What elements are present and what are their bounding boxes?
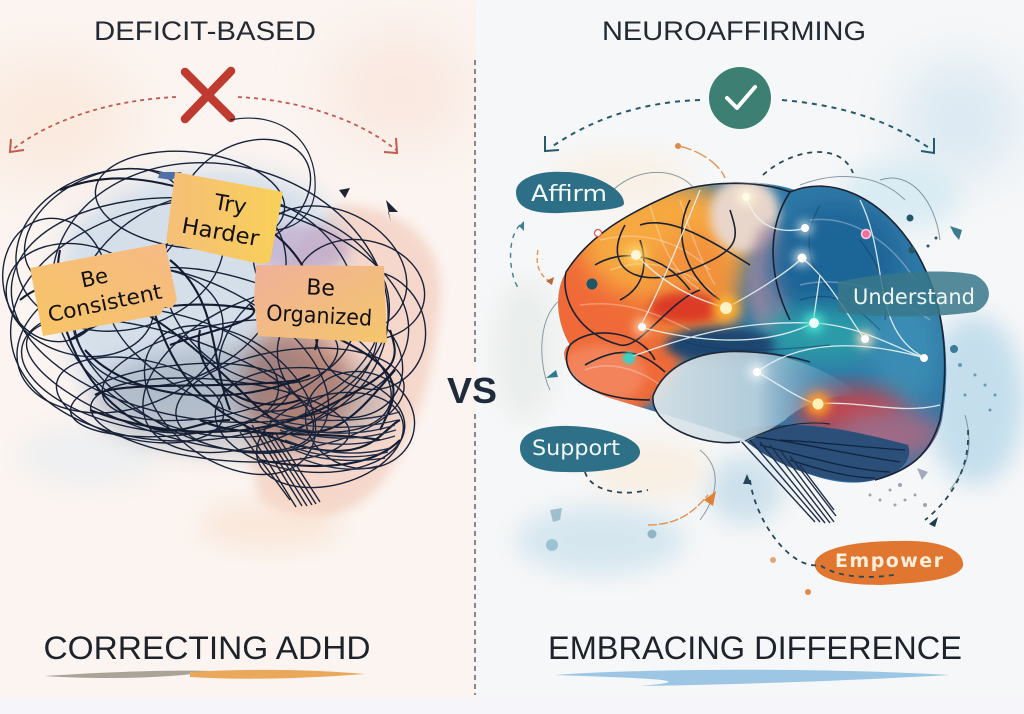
brain: cerebellum	[735, 425, 909, 482]
orange connectors	[537, 146, 725, 525]
brain: stem	[740, 440, 836, 523]
label: Understand	[838, 271, 989, 316]
sticky note: Try Harder: Try	[211, 190, 248, 220]
label: Understand: Understand	[853, 285, 975, 310]
label: Empower	[815, 541, 963, 585]
small arrowheads	[158, 172, 398, 222]
sticky note: Be Organized	[254, 265, 387, 343]
scribble: cerebellum hatching	[262, 410, 400, 469]
arrow: right dashed	[238, 97, 397, 153]
label: Affirm	[516, 172, 624, 213]
panel: deficit-based	[0, 0, 474, 698]
accent markers and speckles	[519, 143, 996, 595]
brain: outlines	[565, 183, 945, 480]
sticky note: Be Consistent: Be	[79, 263, 110, 292]
scribble: brain stem	[240, 425, 320, 507]
arrow: left dashed	[10, 97, 176, 152]
brain: cortex streaks	[580, 200, 930, 385]
icon: check badge	[709, 67, 771, 129]
label: Empower: Empower	[835, 550, 944, 572]
panel: neuroaffirming	[476, 0, 1024, 698]
colourful brain	[558, 182, 946, 524]
sticky note: Be Consistent	[30, 243, 177, 336]
label: Affirm: Affirm	[531, 182, 607, 207]
label: Support: Support	[532, 436, 620, 460]
sticky note: Try Harder: Harder	[180, 214, 262, 252]
brain: glowing nodes	[586, 188, 928, 416]
washes: left panel	[0, 35, 470, 549]
brain: neural connections	[627, 190, 940, 409]
sticky note: Be Organized: Be	[306, 275, 336, 302]
brain: blue parietal lobe	[770, 205, 900, 325]
dashed connectors	[511, 152, 968, 577]
divider	[474, 60, 476, 695]
sticky note: Try Harder	[166, 172, 283, 264]
heading: embracing difference: EMBRACING DIFFERENCE	[548, 630, 962, 666]
heading: correcting ADHD: CORRECTING ADHD	[44, 630, 370, 666]
scribbled brain	[0, 117, 442, 505]
arrow: right dashed	[782, 100, 934, 153]
label: Support	[520, 426, 640, 472]
brush stroke: orange	[45, 670, 365, 679]
sticky note: Be Organized: Organized	[266, 301, 373, 332]
icon: red X	[185, 71, 231, 119]
scribble: dense lower strokes	[20, 178, 400, 466]
heading: deficit-based: DEFICIT-BASED	[94, 16, 316, 46]
VS label: VS	[447, 370, 497, 411]
heading: neuroaffirming: NEUROAFFIRMING	[602, 16, 866, 46]
sticky note: Be Consistent: Consistent	[46, 279, 164, 327]
brain: warm frontal lobe	[558, 235, 689, 410]
brain: temporal lobe	[653, 351, 860, 443]
washes: right panel	[495, 60, 1024, 575]
brush stroke: blue	[555, 670, 950, 686]
wispy outer lines	[542, 172, 969, 520]
arrow: left dashed	[545, 100, 700, 151]
